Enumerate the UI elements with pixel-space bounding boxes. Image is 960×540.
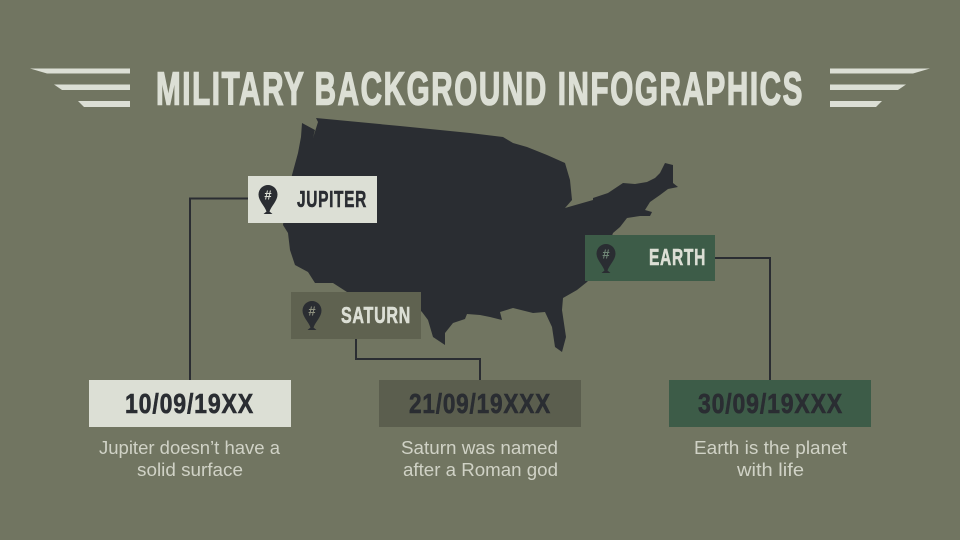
icon: Saturn pin: # <box>308 304 316 318</box>
date box: Earth <box>669 380 871 427</box>
text: Earth description: with life <box>736 460 804 480</box>
connector: Jupiter <box>190 198 248 380</box>
map: United States silhouette <box>283 118 678 352</box>
date box: Saturn <box>379 380 581 427</box>
label: Jupiter: JUPITER <box>297 186 367 212</box>
text: Saturn description: after a Roman god <box>403 460 558 480</box>
date box: Jupiter <box>89 380 291 427</box>
date box: Earth: 30/09/19XXX <box>698 388 843 419</box>
label: Saturn <box>291 292 421 339</box>
icon: right wing stripes <box>830 68 930 107</box>
label: Saturn: SATURN <box>341 302 411 328</box>
icon: left wing stripes <box>30 68 130 107</box>
icon: Earth pin: # <box>602 246 610 262</box>
connector: Earth <box>715 258 770 380</box>
text: Jupiter description: Jupiter doesn’t have a <box>99 438 281 458</box>
date box: Jupiter: 10/09/19XX <box>125 388 254 419</box>
connector: Saturn <box>356 339 480 380</box>
label: Earth <box>585 235 715 281</box>
text: Earth description: Earth is the planet <box>694 438 847 458</box>
text: Saturn description: Saturn was named <box>401 438 558 458</box>
text: Jupiter description: solid surface <box>137 460 243 480</box>
label: Jupiter <box>248 176 377 223</box>
text: Saturn description <box>401 438 558 480</box>
text: Jupiter description <box>99 438 281 480</box>
icon: Jupiter pin: # <box>264 188 272 202</box>
date box: Saturn: 21/09/19XXX <box>409 388 551 419</box>
text: Earth description <box>694 438 847 480</box>
label: Earth: EARTH <box>649 244 706 270</box>
